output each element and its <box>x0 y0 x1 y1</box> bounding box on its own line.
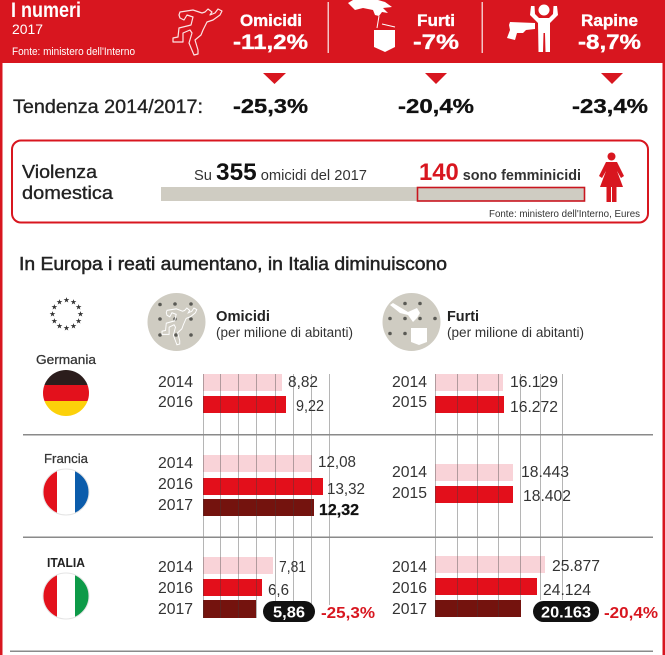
value labels furti: 16.129 <box>510 374 558 391</box>
icon: hand picking pocket <box>348 0 395 52</box>
year labels omicidi: 2014 <box>158 374 193 391</box>
panel heading: Violenza <box>22 161 98 182</box>
row: Italia <box>43 555 545 619</box>
arrow: omicidi down <box>263 73 286 84</box>
trend furti: -20,4% <box>398 96 474 118</box>
panel: header band <box>0 0 665 63</box>
year labels omicidi: 2016 <box>158 394 193 411</box>
header year: 2017 <box>12 21 43 37</box>
furti bars <box>435 464 513 503</box>
trend row 2014/2017 <box>13 73 648 118</box>
omicidi column heading <box>216 309 353 340</box>
header source: Fonte: ministero dell'Interno <box>12 46 135 58</box>
callout: furti Italy 2017 <box>533 601 658 622</box>
panel source: Fonte: ministero dell'Interno, Eures <box>489 209 640 220</box>
omicidi bars <box>203 557 273 618</box>
value labels omicidi: 7,81 <box>279 559 306 576</box>
country name: Francia <box>44 451 89 466</box>
value labels omicidi: 12,32 <box>319 502 359 519</box>
panel heading: domestica <box>22 182 114 203</box>
callout: furti Italy 2017: -20,4% <box>604 605 658 622</box>
femicides text: 140 sono femminicidi <box>419 159 581 186</box>
icon: gun and person with raised hands <box>507 4 558 52</box>
year labels furti: 2015 <box>392 394 427 411</box>
furti bars <box>435 374 504 413</box>
value labels omicidi: 12,08 <box>318 454 356 471</box>
value labels furti: 18.402 <box>523 488 571 505</box>
year labels omicidi: 2014 <box>158 455 193 472</box>
country name: Germania <box>36 352 97 367</box>
callout: omicidi Italy 2017: 5,86 <box>273 604 305 622</box>
icon: furti grey circle <box>382 293 440 351</box>
icon: woman <box>599 152 624 202</box>
value labels omicidi <box>268 374 365 599</box>
omicidi bars <box>203 455 323 516</box>
rapine value: -8,7% <box>578 31 641 54</box>
callout: omicidi Italy 2017 <box>263 601 375 622</box>
year labels furti: 2017 <box>392 601 427 618</box>
furti label: Furti <box>417 11 455 30</box>
omicidi value: -11,2% <box>233 31 308 54</box>
country name: ITALIA <box>47 555 86 570</box>
year labels omicidi: 2014 <box>158 559 193 576</box>
year labels furti <box>392 374 427 618</box>
icon: EU stars: ★★★★★★★★★★★★ <box>49 296 84 332</box>
value labels furti: 24.124 <box>543 582 591 599</box>
total homicides text: Su 355 omicidi del 2017 <box>194 159 367 186</box>
omicidi bars <box>203 374 286 413</box>
omicidi column heading: (per milione di abitanti) <box>216 325 353 340</box>
icon: Italian flag <box>43 573 89 619</box>
omicidi column heading: Omicidi <box>216 309 270 325</box>
year labels furti: 2016 <box>392 580 427 597</box>
trend rapine: -23,4% <box>572 96 648 118</box>
callout: furti Italy 2017: 20.163 <box>541 604 591 622</box>
value labels omicidi: 6,6 <box>268 582 289 599</box>
year labels furti: 2014 <box>392 464 427 481</box>
year labels furti: 2014 <box>392 374 427 391</box>
icon: omicidi grey circle <box>148 293 206 351</box>
rapine label: Rapine <box>581 11 638 30</box>
year labels omicidi <box>158 374 193 618</box>
furti value: -7% <box>413 31 459 54</box>
divider one <box>328 2 329 53</box>
divider two <box>482 2 483 53</box>
year labels omicidi: 2016 <box>158 580 193 597</box>
proportion bar <box>161 187 585 201</box>
furti column heading: (per milione di abitanti) <box>447 325 584 340</box>
value labels furti: 16.272 <box>510 399 558 416</box>
value labels omicidi: 13,32 <box>327 481 365 498</box>
value labels omicidi: 9,22 <box>296 398 324 415</box>
year labels omicidi: 2017 <box>158 601 193 618</box>
icon: French flag <box>43 469 89 515</box>
year labels omicidi: 2016 <box>158 476 193 493</box>
trend omicidi: -25,3% <box>233 96 308 118</box>
panel: violenza domestica <box>12 140 648 222</box>
year labels furti: 2015 <box>392 485 427 502</box>
value labels furti <box>510 374 600 599</box>
year labels omicidi: 2017 <box>158 497 193 514</box>
value labels furti: 18.443 <box>521 464 569 481</box>
row: Germania <box>36 352 504 416</box>
value labels furti: 25.877 <box>552 558 600 575</box>
year labels furti: 2014 <box>392 559 427 576</box>
furti column heading: Furti <box>447 309 479 325</box>
arrow: furti down <box>425 73 447 84</box>
omicidi label: Omicidi <box>240 11 302 30</box>
furti column heading <box>447 309 584 340</box>
arrow: rapine down <box>601 73 623 84</box>
icon: German flag <box>43 370 89 416</box>
furti bars <box>435 556 545 617</box>
value labels omicidi: 8,82 <box>288 374 318 391</box>
section heading: In Europa i reati aumentano, in Italia diminuiscono <box>19 254 447 274</box>
icon: chalk outline body <box>173 9 222 55</box>
callout: omicidi Italy 2017: -25,3% <box>321 605 375 622</box>
trend label: Tendenza 2014/2017: <box>13 97 203 118</box>
row: Francia <box>43 451 513 516</box>
